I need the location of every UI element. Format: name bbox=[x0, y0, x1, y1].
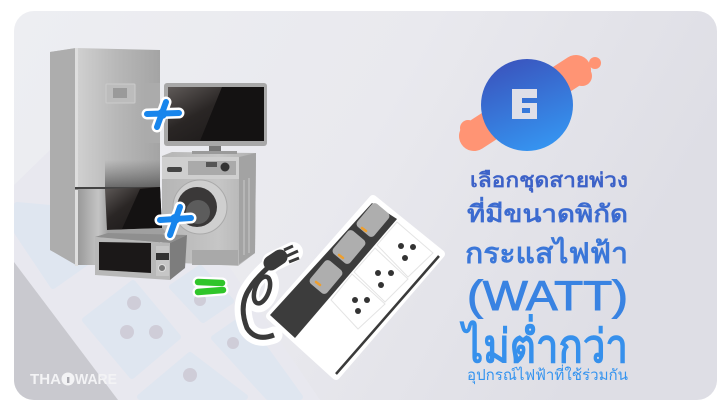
icon: equals sign bbox=[198, 282, 223, 292]
heading text: ที่มีขนาดพิกัด bbox=[467, 196, 628, 228]
heading text bbox=[459, 169, 628, 385]
sockets bbox=[331, 222, 433, 329]
icon: microwave bbox=[95, 233, 187, 280]
watermark power strip bbox=[14, 202, 294, 400]
icon: laptop bbox=[105, 187, 166, 236]
heading text: เลือกชุดสายพ่วง bbox=[470, 169, 628, 193]
orange splash bbox=[460, 57, 601, 136]
white sticker outline bbox=[243, 199, 441, 376]
logo: Thaiware: THA bbox=[30, 371, 61, 388]
icon: television bbox=[164, 83, 267, 154]
heading text: อุปกรณ์ไฟฟ้าที่ใช้ร่วมกัน bbox=[467, 364, 628, 385]
logo: Thaiware: WARE bbox=[75, 371, 117, 388]
switches bbox=[308, 201, 391, 296]
icon: refrigerator bbox=[50, 48, 160, 266]
icon: power strip with cord bbox=[243, 199, 441, 376]
logo: Thaiware bbox=[30, 371, 117, 388]
circle bbox=[481, 59, 573, 151]
numeral 6 bbox=[512, 89, 537, 119]
icon: number badge bbox=[460, 57, 601, 151]
icon: washing machine bbox=[162, 152, 256, 266]
heading text: กระแสไฟฟ้า bbox=[465, 236, 628, 270]
heading text: (WATT) bbox=[467, 272, 628, 319]
strip dark top bbox=[270, 203, 397, 338]
strip shadow edge bbox=[336, 256, 439, 374]
cord and plug bbox=[243, 246, 299, 337]
icon: plus sign top bbox=[147, 102, 179, 127]
heading text: ไม่ต่ำกว่า bbox=[459, 314, 628, 372]
icon: plus sign bottom bbox=[160, 207, 191, 235]
